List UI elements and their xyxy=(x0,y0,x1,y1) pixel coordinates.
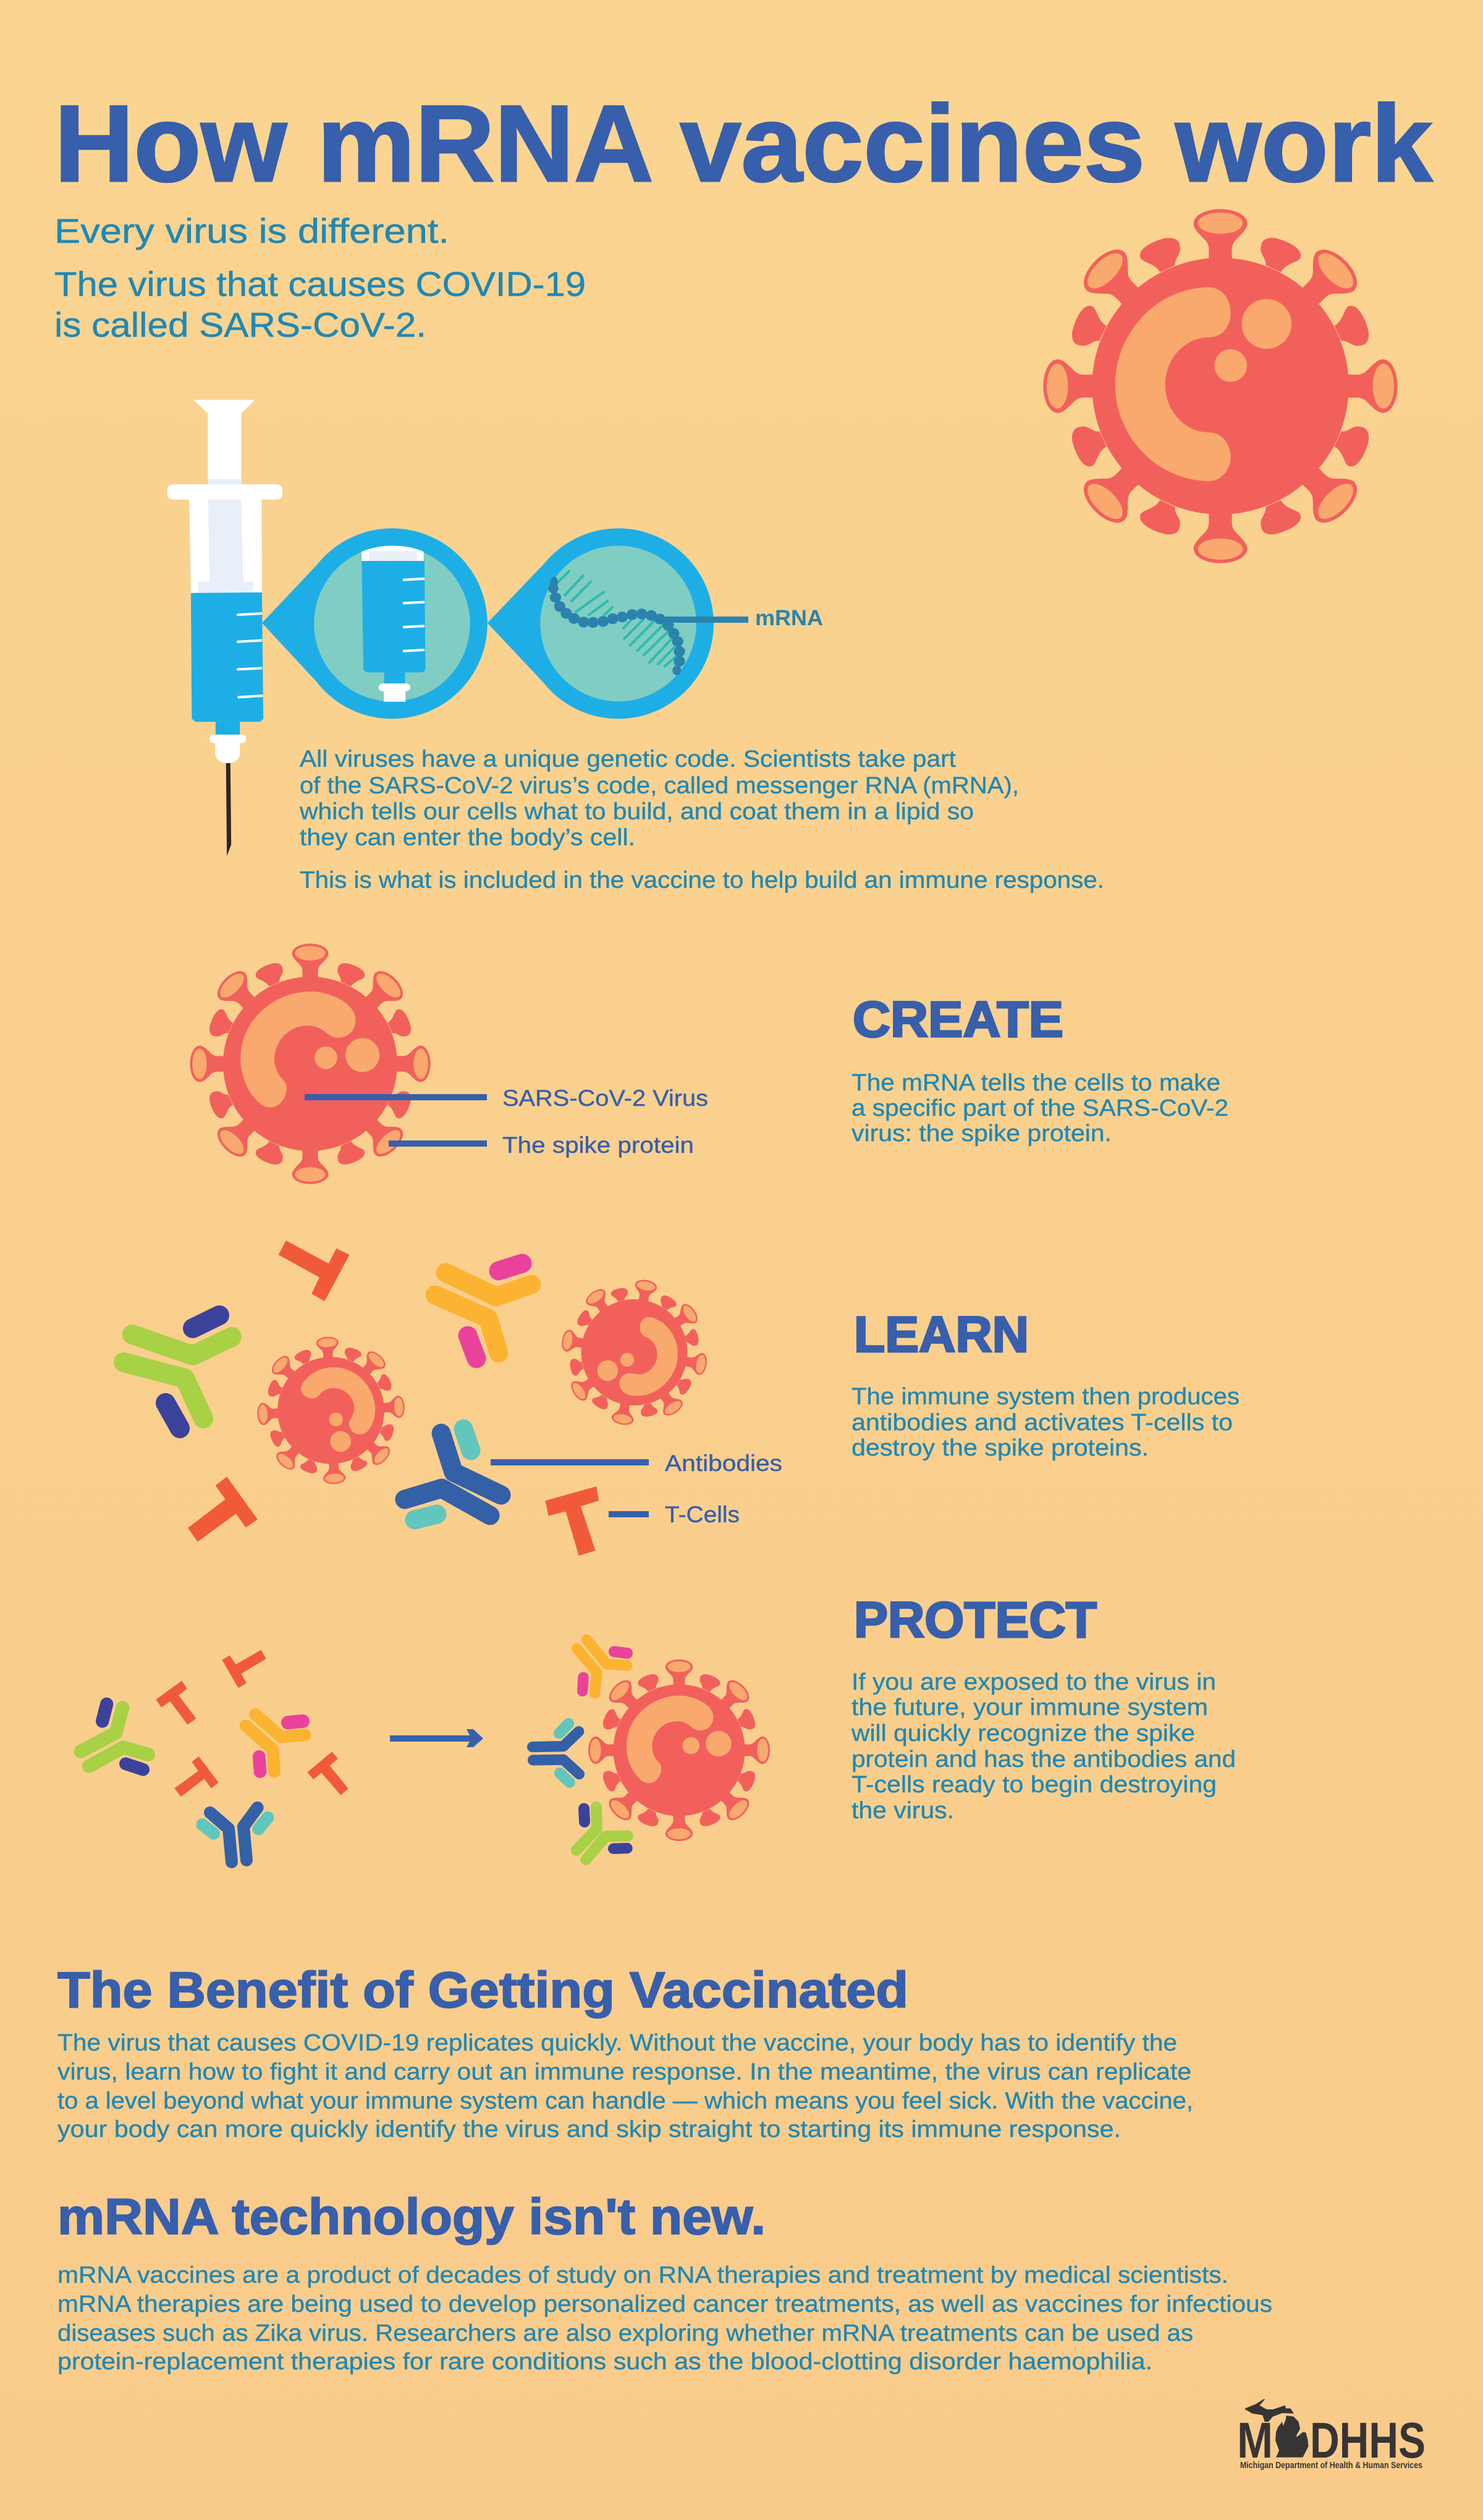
panel: mRNA technology: mRNA vaccines are a product of decades of study on RNA therapies and treatment by medical scientists. xyxy=(57,2262,1228,2288)
intro heading text: The virus that causes COVID-19 xyxy=(54,264,586,303)
icon: create virus xyxy=(190,943,431,1184)
panel: protect text: the future, your immune system xyxy=(851,1695,1208,1721)
logo: MDHHS: Michigan Department of Health & Human Services xyxy=(1240,2460,1422,2471)
icon: learn T-cells xyxy=(188,1241,599,1556)
intro body text: This is what is included in the vaccine to help build an immune response. xyxy=(300,867,1104,893)
intro heading text xyxy=(54,211,586,344)
panel: benefit of vaccination: The virus that causes COVID-19 replicates quickly. Without the vaccine, your body has to identify the xyxy=(57,2030,1177,2056)
icon: bound yellow antibody xyxy=(577,1640,627,1693)
mRNA callout xyxy=(664,606,823,630)
panel: mRNA technology: protein-replacement therapies for rare conditions such as the blood-clotting disorder haemophilia. xyxy=(57,2349,1152,2375)
create callouts: The spike protein xyxy=(502,1132,694,1158)
icon: learn virus right xyxy=(549,1268,719,1437)
arrow xyxy=(390,1729,483,1747)
intro body text: of the SARS-CoV-2 virus’s code, called messenger RNA (mRNA), xyxy=(300,773,1019,799)
panel: protect text: T-cells ready to begin destroying xyxy=(851,1772,1217,1798)
panel: benefit of vaccination: The Benefit of Getting Vaccinated xyxy=(57,1962,908,2018)
learn callouts: T-Cells xyxy=(665,1502,740,1527)
intro body text xyxy=(299,746,1104,893)
icon: protect yellow antibody xyxy=(246,1714,305,1772)
logo: MDHHS: M xyxy=(1237,2413,1273,2469)
icon: protect green antibody xyxy=(81,1704,148,1769)
icon: learn blue antibody xyxy=(405,1429,501,1520)
icon: large virus xyxy=(1043,209,1398,563)
panel: benefit of vaccination xyxy=(57,1962,1193,2143)
panel: learn text: destroy the spike proteins. xyxy=(851,1435,1149,1461)
panel: create text: virus: the spike protein. xyxy=(851,1121,1112,1147)
panel: learn text: LEARN xyxy=(854,1307,1029,1363)
panel: create text: CREATE xyxy=(853,992,1063,1048)
icon: magnified mRNA lens xyxy=(488,528,714,718)
icon: protect blue antibody xyxy=(202,1808,268,1862)
mRNA callout: mRNA xyxy=(755,606,823,630)
panel: learn text: The immune system then produces xyxy=(851,1384,1240,1410)
panel: protect text xyxy=(851,1592,1236,1824)
intro heading text: Every virus is different. xyxy=(54,211,449,250)
panel: protect text: protein and has the antibodies and xyxy=(851,1747,1236,1772)
icon: syringe xyxy=(167,400,282,856)
panel: benefit of vaccination: virus, learn how to fight it and carry out an immune response. In the meantime, the virus can replicate xyxy=(57,2059,1191,2085)
panel: protect text: the virus. xyxy=(851,1798,954,1824)
create callouts: SARS-CoV-2 Virus xyxy=(502,1085,708,1111)
panel: protect text: If you are exposed to the virus in xyxy=(851,1669,1216,1695)
panel: benefit of vaccination: your body can more quickly identify the virus and skip straight to starting its immune response. xyxy=(57,2117,1121,2143)
panel: benefit of vaccination: to a level beyond what your immune system can handle — which means you feel sick. With the vaccine, xyxy=(57,2088,1193,2114)
icon: protect T-cells xyxy=(156,1650,349,1797)
intro heading text: is called SARS-CoV-2. xyxy=(54,305,426,344)
icon: learn virus left xyxy=(253,1333,408,1488)
panel: protect text: will quickly recognize the spike xyxy=(851,1721,1195,1747)
panel: learn text: antibodies and activates T-cells to xyxy=(851,1410,1233,1436)
panel: protect text: PROTECT xyxy=(854,1592,1097,1648)
panel: mRNA technology: mRNA technology isn't new. xyxy=(57,2189,766,2245)
intro body text: they can enter the body’s cell. xyxy=(300,825,635,851)
logo: MDHHS: DHHS xyxy=(1310,2413,1426,2469)
panel: create text: a specific part of the SARS-CoV-2 xyxy=(851,1095,1228,1121)
title: How mRNA vaccines work xyxy=(54,83,1433,204)
intro body text: which tells our cells what to build, and coat them in a lipid so xyxy=(299,799,974,825)
icon: magnified vial lens xyxy=(262,528,488,718)
icon: learn green antibody xyxy=(124,1315,232,1428)
learn callouts: Antibodies xyxy=(665,1451,782,1476)
icon: learn yellow antibody xyxy=(435,1263,531,1359)
icon: bound blue antibody xyxy=(533,1724,579,1782)
panel: learn text xyxy=(851,1307,1240,1461)
icon: protect virus xyxy=(588,1659,770,1841)
intro body text: All viruses have a unique genetic code. Scientists take part xyxy=(300,746,956,772)
panel: mRNA technology xyxy=(57,2189,1272,2375)
icon: bound green antibody xyxy=(577,1807,628,1860)
learn callouts xyxy=(491,1451,782,1527)
panel: mRNA technology: diseases such as Zika virus. Researchers are also exploring whether mRNA treatments can be used as xyxy=(57,2320,1193,2346)
logo: MDHHS xyxy=(1237,2399,1426,2471)
panel: create text xyxy=(851,992,1228,1147)
panel: create text: The mRNA tells the cells to make xyxy=(851,1070,1220,1096)
create callouts xyxy=(305,1085,708,1158)
panel: mRNA technology: mRNA therapies are being used to develop personalized cancer treatments, as well as vaccines for infectious xyxy=(57,2291,1272,2317)
